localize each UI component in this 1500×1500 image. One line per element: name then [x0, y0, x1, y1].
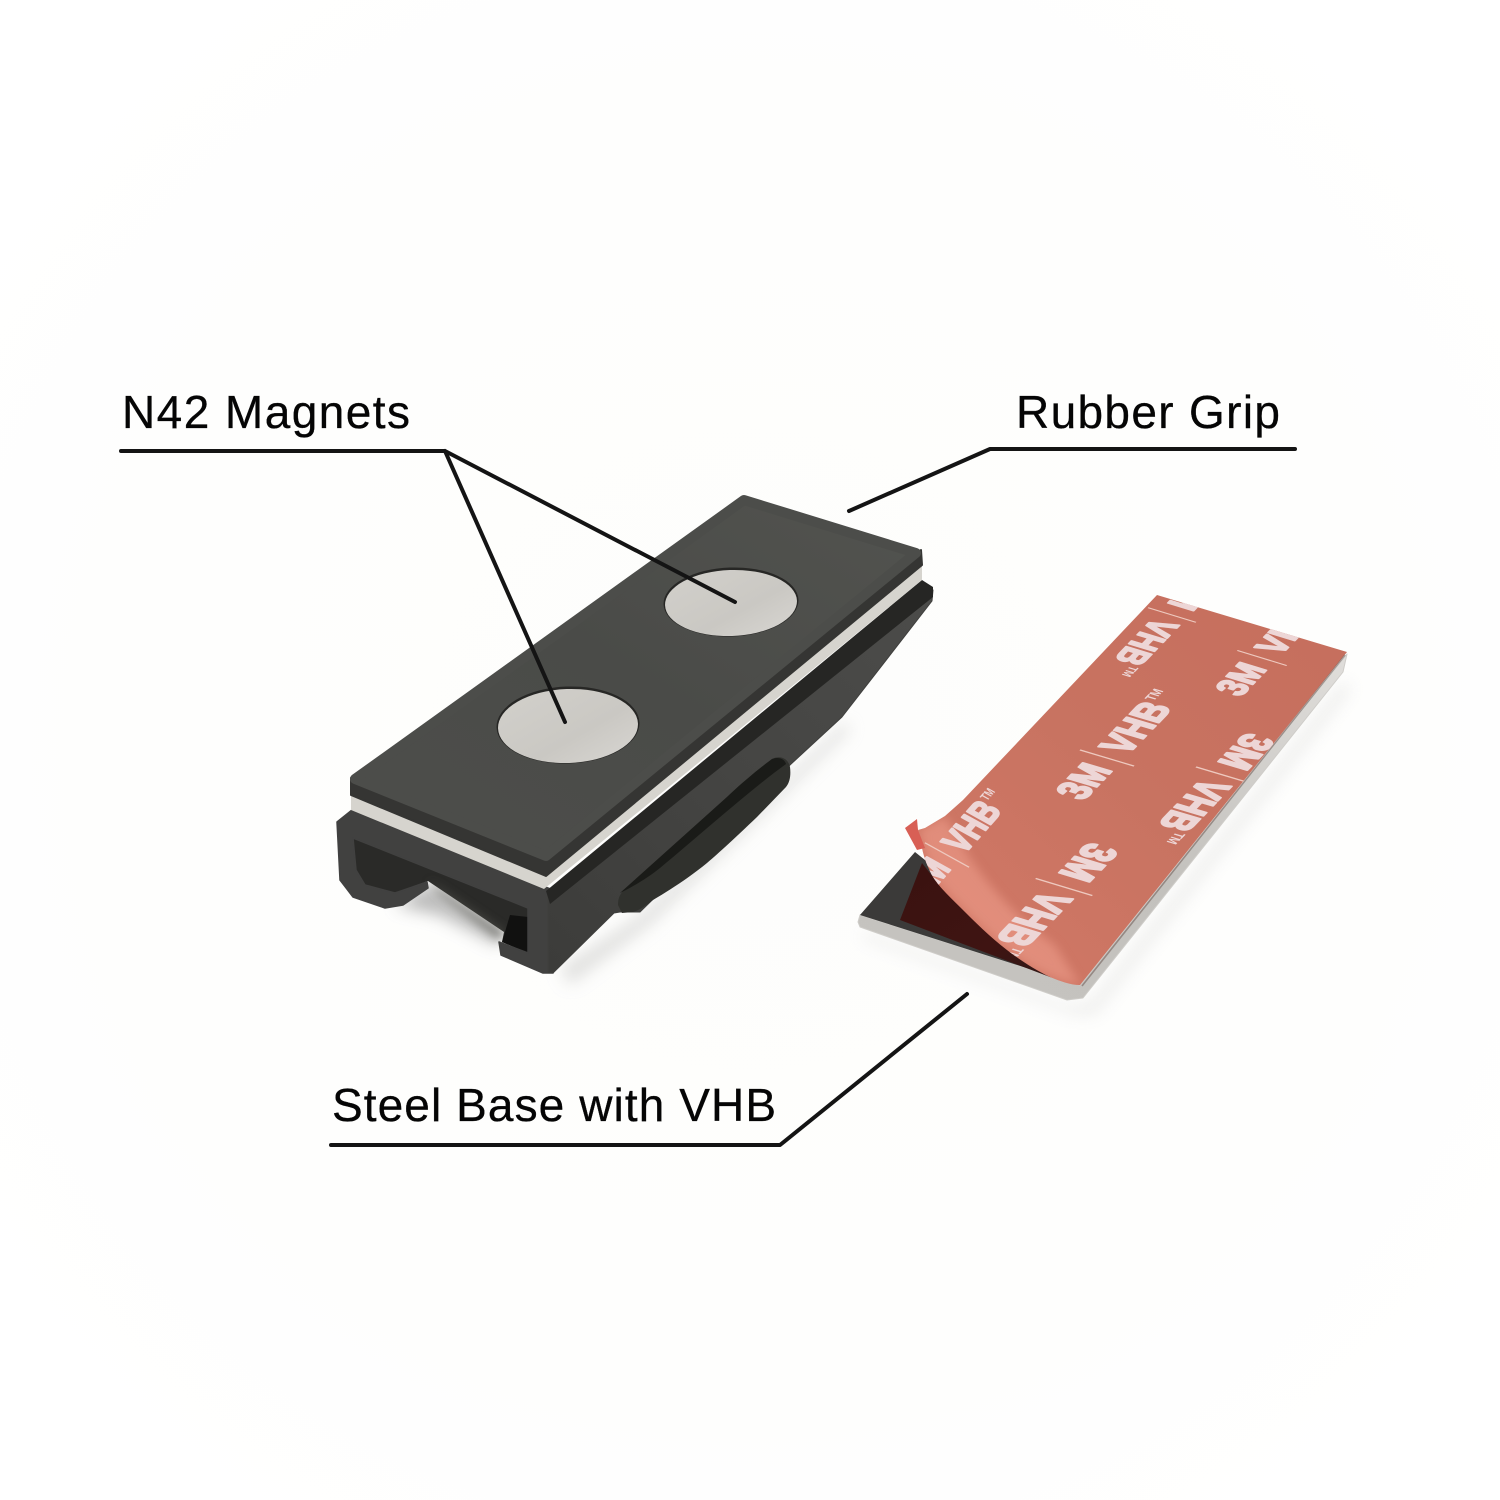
marking: top left row: VHB [1105, 615, 1186, 669]
steel top [860, 852, 1080, 985]
leader line [331, 994, 967, 1145]
marking: top left row [1116, 600, 1198, 678]
printed tape markings [924, 600, 1299, 956]
magnet rear [662, 565, 800, 639]
marking: lower row: VHB [985, 887, 1081, 951]
marking: right row: TM [1163, 831, 1188, 846]
grip dark band [620, 758, 786, 893]
steel edge [858, 654, 1347, 1000]
callout: Rubber Grip [849, 386, 1295, 511]
callout: N42 Magnets [121, 386, 735, 722]
marking: centre row: 3M [1047, 759, 1123, 804]
marking: right row [1160, 734, 1274, 844]
rubber plate top [355, 500, 916, 856]
product infographic [119, 394, 1348, 1147]
clip front frame [337, 810, 553, 973]
clip interior [353, 838, 528, 953]
interior lower shadow [428, 880, 505, 940]
peeled shading [918, 816, 1080, 985]
marking: lower row: TM [1001, 946, 1028, 962]
mount: magnetic clip with rubber grip [337, 500, 933, 985]
peeled tip [905, 819, 925, 850]
marking: peeled row [924, 788, 1000, 885]
notch [502, 915, 528, 953]
clip side body [548, 582, 933, 973]
marking: top right row: TM [1294, 594, 1317, 607]
exposed adhesive [900, 863, 1080, 985]
label: Steel Base with VHB [332, 1079, 776, 1131]
marking: peeled row: 3M [896, 852, 960, 902]
marking: peeled row: TM [978, 786, 999, 803]
label: Rubber Grip [1016, 386, 1280, 438]
leader line [849, 449, 1295, 511]
label: N42 Magnets [122, 386, 410, 438]
marking: top right row [1216, 629, 1299, 696]
steel strip [351, 565, 922, 889]
marking: right row: VHB [1148, 775, 1239, 836]
rubber plate side [351, 550, 922, 876]
callout: Steel Base with VHB [331, 994, 967, 1145]
marking: top right row: VHB [1247, 603, 1330, 658]
tape liner [918, 595, 1347, 985]
leader lines [121, 451, 735, 722]
marking: centre row: TM [1142, 687, 1167, 702]
adhesive seam [1082, 655, 1345, 986]
marking: peeled row: VHB [933, 794, 1010, 859]
upper rail [546, 580, 933, 904]
magnet front [495, 684, 641, 766]
marking: top left row: TM [1118, 665, 1140, 678]
side grip ridge [618, 757, 790, 913]
steel base with peeled VHB tape [858, 573, 1350, 1014]
faint shadow of base [862, 680, 1350, 1014]
marking: lower row [998, 843, 1117, 956]
marking: top left row: 3M [1158, 574, 1225, 614]
marking: top right row: 3M [1207, 659, 1276, 700]
marking: centre row [1056, 688, 1170, 800]
marking: right row: 3M [1207, 729, 1283, 774]
marking: centre row: VHB [1091, 697, 1182, 758]
soft shadow under clip [395, 722, 850, 985]
marking: lower row: 3M [1048, 839, 1128, 886]
